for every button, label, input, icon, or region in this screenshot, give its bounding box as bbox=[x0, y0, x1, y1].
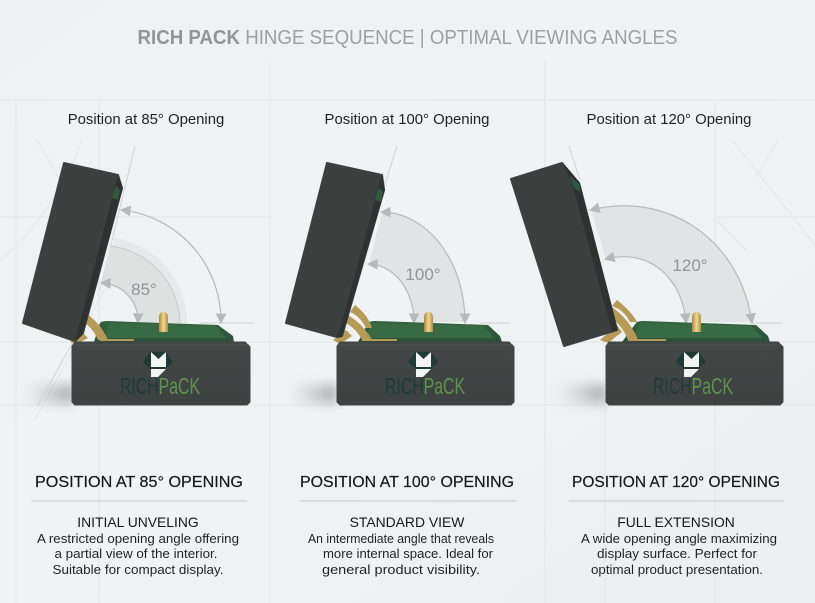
description: 100 bbox=[308, 514, 494, 577]
description: 100: more internal space. Ideal for bbox=[323, 546, 494, 561]
angle value: 85° bbox=[131, 280, 157, 299]
angle guide line bbox=[38, 146, 254, 405]
panel: 120 degree opening bbox=[511, 112, 784, 577]
hinge bbox=[70, 312, 134, 344]
panel: 100 degree opening bbox=[286, 112, 516, 577]
description: 85: Suitable for compact display. bbox=[52, 562, 224, 577]
ground shadow bbox=[24, 384, 74, 404]
description: 100: general product visibility. bbox=[322, 562, 480, 577]
description: 85 bbox=[37, 514, 239, 577]
description: 85: INITIAL UNVELING bbox=[77, 514, 199, 530]
hinge bbox=[600, 300, 666, 343]
ring bbox=[424, 312, 433, 332]
title: RICH PACK HINGE SEQUENCE | OPTIMAL VIEWING ANGLES bbox=[138, 26, 678, 49]
description: 85: A restricted opening angle offering bbox=[37, 531, 239, 546]
description: 120 bbox=[581, 514, 777, 577]
angle value: 100° bbox=[405, 265, 441, 284]
logo: RICHPaCK bbox=[385, 373, 465, 399]
description: 120: A wide opening angle maximizing bbox=[581, 531, 777, 546]
description: 120: optimal product presentation. bbox=[591, 562, 763, 577]
angle fan bbox=[369, 212, 465, 322]
box base bbox=[606, 342, 783, 405]
position label: 100: Position at 100° Opening bbox=[325, 112, 489, 128]
cushion bbox=[622, 321, 770, 342]
box base bbox=[72, 342, 250, 405]
angle fan bbox=[102, 238, 187, 323]
ground shadow bbox=[556, 384, 606, 404]
heading: 120: POSITION AT 120° OPENING bbox=[572, 474, 780, 491]
angle fan bbox=[591, 206, 752, 322]
cushion bbox=[358, 321, 502, 342]
angle arrows bbox=[591, 206, 752, 322]
box base bbox=[337, 342, 514, 405]
angle value: 120° bbox=[672, 256, 708, 275]
description: 100: An intermediate angle that reveals bbox=[308, 531, 494, 546]
panel: 85 degree opening bbox=[23, 112, 254, 577]
logo bbox=[385, 352, 465, 399]
ground shadow bbox=[288, 384, 337, 404]
logo: RICHPaCK bbox=[120, 373, 200, 399]
description: 100: STANDARD VIEW bbox=[350, 514, 465, 530]
logo bbox=[653, 352, 733, 399]
ring bbox=[692, 312, 701, 332]
logo bbox=[120, 352, 200, 399]
ring bbox=[159, 312, 168, 332]
description: 120: display surface. Perfect for bbox=[597, 546, 758, 561]
description: 120: FULL EXTENSION bbox=[617, 514, 735, 530]
description: 85: a partial view of the interior. bbox=[54, 546, 218, 561]
angle arrows bbox=[102, 210, 221, 322]
angle arrows bbox=[369, 212, 465, 322]
cushion bbox=[94, 321, 234, 342]
lid bbox=[23, 163, 123, 342]
angle guide line bbox=[569, 146, 782, 323]
hinge bbox=[333, 305, 397, 344]
lid bbox=[286, 163, 385, 338]
logo: RICHPaCK bbox=[653, 373, 733, 399]
position label: 85: Position at 85° Opening bbox=[68, 112, 224, 128]
heading: 100: POSITION AT 100° OPENING bbox=[300, 474, 514, 491]
angle guide line bbox=[380, 146, 510, 323]
heading: 85: POSITION AT 85° OPENING bbox=[35, 474, 243, 491]
position label: 120: Position at 120° Opening bbox=[587, 112, 751, 128]
lid bbox=[511, 162, 618, 346]
